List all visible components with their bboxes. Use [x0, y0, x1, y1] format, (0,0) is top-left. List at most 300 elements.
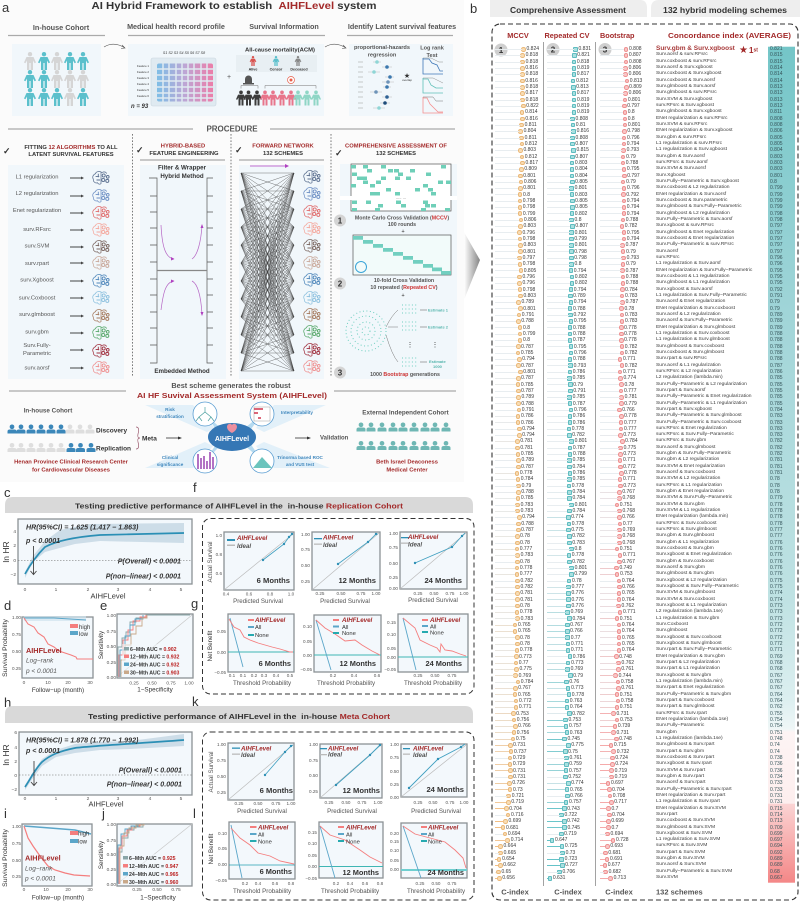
panel k: calibration 6 months: 6 Months: [260, 786, 293, 795]
scheme names column: surv.RFsrc & Surv.glmboost: [656, 527, 717, 532]
Bootstrap lollipop column: 0.708: [613, 793, 625, 799]
average c-index values column: 0.773: [770, 616, 783, 622]
panel l: decision curve 6 months: Net Benefit: [208, 833, 215, 864]
panel k: calibration 6 months: 1.00: [287, 801, 296, 806]
Repeated CV lollipop column: 0.776: [571, 603, 584, 609]
section: medical record and survival information: Medical health record profile: [127, 22, 225, 31]
panel a background: [0, 0, 464, 482]
average c-index values column: 0.692: [770, 850, 783, 856]
panel e: ROC curves: 1−Specificity: [137, 686, 174, 694]
average c-index values column: 0.785: [770, 382, 783, 388]
section: medical record and survival information: [127, 22, 325, 116]
Bootstrap lollipop column: 0.784: [625, 438, 638, 444]
MCCV lollipop column: 0.8: [523, 192, 530, 198]
panel k: calibration 6 months: Actual Survival: [208, 752, 215, 792]
panel i: survival curves: p < 0.0001: [24, 876, 56, 882]
Bootstrap lollipop column: 0.797: [627, 173, 640, 179]
panel i: survival curves: [2, 824, 93, 902]
scheme names column: ENet regularization & Surv.coxboost: [656, 306, 735, 311]
panel k: calibration 6 months: [208, 742, 296, 815]
Repeated CV lollipop column: 0.771: [571, 647, 583, 653]
Bootstrap lollipop column: 0.719: [615, 774, 627, 780]
panel b: dashed frame: [492, 24, 798, 900]
Bootstrap lollipop column: 0.788: [626, 280, 638, 286]
panel f: calibration 6 months: Ideal: [237, 543, 251, 550]
panel h: restricted cubic spline: 2: [87, 796, 90, 802]
panel k: calibration 12 months: 0.50: [309, 773, 318, 778]
average c-index values column: 0.797: [770, 223, 783, 229]
average c-index values column: 0.771: [770, 647, 783, 653]
brain icons: [304, 171, 320, 373]
panel l: decision curve 12 months: Threshold Probability: [321, 888, 380, 895]
MCCV lollipop column: 0.818: [526, 97, 538, 103]
panel g: decision curve 6 months: 0.05: [217, 629, 226, 634]
panel g: decision curve 12 months: [300, 615, 381, 687]
panel k: calibration 6 months: 0.25: [235, 801, 244, 806]
scheme names column: Surv.xgboost & Surv.coxboost: [656, 635, 721, 640]
step 2 badge and caption: 10-fold Cross Validation: [374, 278, 434, 284]
panel k: calibration 12 months: 1.00: [374, 800, 383, 805]
Bootstrap lollipop column: 0.79: [626, 154, 636, 160]
column: forward network: FORWARD NETWORK: [252, 144, 315, 150]
Bootstrap lollipop column: 0.795: [627, 230, 639, 236]
panel h: restricted cubic spline: [1, 730, 192, 808]
panel e: ROC curves: 6−Mth AUC = 0.902: [130, 647, 177, 653]
panel e: ROC curves: [98, 613, 194, 694]
panel g: decision curve 12 months: 12 Months: [339, 659, 376, 668]
Repeated CV lollipop column: 0.803: [575, 160, 587, 166]
scheme names column: ENet regularization & Surv.glmboost: [656, 325, 735, 330]
scheme names column: Surv.aorsf & Surv.gbm: [656, 565, 705, 570]
scheme names column: Surv.rpart & Surv.Fully−Parametric: [656, 647, 732, 652]
column: hybrid feature engineering: ✓: [136, 145, 144, 155]
panel f: calibration 12 months: 0.75: [301, 547, 310, 552]
panel g: decision curve 6 months: AIHFLevel: [254, 617, 286, 624]
MCCV lollipop column: 0.785: [521, 350, 533, 356]
Repeated CV lollipop column: 0.782: [572, 559, 585, 565]
panel l: decision curve 24 months: [390, 823, 467, 895]
Repeated CV lollipop column: 0.786: [573, 420, 585, 426]
panel l: decision curve 6 months: Threshold Probability: [233, 888, 292, 895]
Repeated CV lollipop column: 0.765: [570, 787, 583, 793]
Repeated CV lollipop column: 0.8: [575, 261, 581, 267]
Repeated CV lollipop column: 0.787: [573, 445, 585, 451]
panel f: calibration 6 months: 0.8: [267, 592, 274, 596]
survival legend: Deceased: [290, 68, 308, 72]
MCCV lollipop column: 0.812: [525, 141, 537, 147]
scheme names column: Surv.glmboost & Surv.coxboost: [656, 344, 724, 349]
panel c: restricted cubic spline: 4: [149, 587, 152, 593]
average c-index values column: 0.781: [770, 470, 783, 476]
Bootstrap lollipop column: 0.808: [629, 59, 642, 65]
scheme names column: L1 regularization & Surv.rpart: [656, 799, 720, 804]
Bootstrap lollipop column: 0.795: [627, 166, 639, 172]
average c-index values column: 0.713: [770, 818, 783, 824]
Bootstrap lollipop column: 0.794: [627, 204, 639, 210]
panel j: ROC curves: 12−Mth AUC = 0.947: [129, 864, 179, 870]
bootstrap diagram: ⋮: [406, 342, 414, 349]
average c-index values column: [770, 46, 783, 881]
MCCV lollipop column: 0.784: [521, 679, 533, 685]
AIHFLevel hub diagram: Clinical: [162, 455, 178, 460]
Bootstrap lollipop column: 0.766: [622, 514, 635, 520]
panel h: restricted cubic spline: 2: [14, 759, 17, 765]
Bootstrap lollipop column: 0.771: [623, 476, 636, 482]
panel f: calibration 6 months: Predicted Survival: [233, 598, 283, 605]
Bootstrap lollipop column: 0.761: [621, 666, 634, 672]
average c-index values column: 0.689: [770, 862, 783, 868]
average c-index values column: 0.773: [770, 603, 783, 609]
scheme names column: L1 regularization & Surv.aorsf: [656, 261, 721, 266]
Repeated CV lollipop column: 0.799: [574, 571, 587, 577]
MCCV lollipop column: 0.789: [521, 457, 534, 463]
Repeated CV lollipop column: 0.784: [572, 508, 585, 514]
column headers: MCCV: [507, 31, 529, 40]
average c-index values column: 0.764: [770, 692, 783, 698]
Bootstrap lollipop column: 0.783: [625, 318, 637, 324]
scheme names column: surv.RFsrc & Surv.rpart: [656, 711, 707, 716]
MCCV lollipop column: 0.817: [525, 90, 538, 96]
panel f: calibration 12 months: 12 Months: [338, 576, 376, 585]
AIHFLevel hub diagram: Interpretability: [281, 410, 313, 415]
arrow: records to features: [325, 44, 346, 48]
Repeated CV lollipop column: 0.819: [577, 65, 589, 71]
Repeated CV lollipop column: 0.753: [569, 717, 581, 723]
panel j: ROC curves: 1−Specificity: [140, 894, 177, 902]
panel k: calibration 24 months: [390, 742, 469, 815]
Repeated CV lollipop column: 0.73: [566, 850, 575, 856]
Repeated CV lollipop column: 0.816: [577, 128, 589, 134]
panel letters: i: [4, 806, 7, 821]
MCCV lollipop column: 0.786: [521, 413, 534, 419]
MCCV lollipop column: 0.791: [522, 312, 534, 318]
Repeated CV lollipop column: 0.769: [571, 609, 583, 615]
column: hybrid feature engineering: Filter & Wrapper: [158, 164, 207, 172]
scheme names column: Surv.glmboost: [656, 628, 687, 633]
scheme names column: Surv.coxboost & Surv.rpart: [656, 755, 714, 760]
Bootstrap lollipop column: 0.78: [624, 382, 634, 388]
MCCV lollipop column: 0.656: [502, 875, 515, 881]
MCCV lollipop column: 0.818: [526, 52, 538, 58]
Bootstrap lollipop column: 0.762: [622, 660, 634, 666]
Repeated CV lollipop column: 0.788: [573, 306, 586, 312]
average c-index values column: 0.778: [770, 502, 783, 508]
scheme names column: Surv.Fully−Parametric & surv.RFsrc: [656, 242, 734, 247]
Repeated CV lollipop column: 0.764: [570, 704, 582, 710]
AIHFLevel hub diagram: Trinorma based ROC: [277, 455, 324, 460]
scheme names column: Surv.xgboost & L1 regularization: [656, 603, 727, 608]
MCCV lollipop column: 0.814: [525, 109, 538, 115]
filter and embedded axes: [149, 178, 213, 363]
average c-index values column: 0.776: [770, 571, 783, 577]
Bootstrap lollipop column: 0.704: [612, 812, 625, 818]
scheme names column: L2 regularization (lambda.1se): [656, 609, 723, 614]
column: comprehensive assessment: ✓: [335, 148, 343, 158]
MCCV lollipop column: 0.765: [518, 622, 531, 628]
panel k: calibration 6 months: Ideal: [241, 752, 255, 759]
MCCV lollipop column: 0.8: [523, 337, 530, 343]
scheme names column: Surv.coxboost & L1 regularization: [656, 274, 729, 279]
panel g: decision curve 6 months: 6 Months: [259, 659, 291, 668]
average c-index values column: 0.813: [770, 97, 783, 103]
panel j: ROC curves: 0.75: [107, 838, 116, 844]
scheme names column: Surv.Fully−Parametric & Surv.xgboost: [656, 179, 739, 184]
panel k: calibration 12 months: 0.25: [309, 789, 318, 794]
panel l: decision curve 12 months: AIHFLevel: [345, 824, 377, 832]
panel k: calibration 24 months: 0.50: [429, 800, 438, 805]
icon: interpretability chart: [254, 407, 270, 421]
top scheme star: 1: [749, 46, 753, 55]
Repeated CV lollipop column: 0.743: [567, 806, 580, 812]
panel i: survival curves: Log−rank: [25, 866, 53, 872]
panel d: survival curves: 10: [45, 680, 51, 686]
average c-index values column: 0.777: [770, 533, 783, 539]
panel l: decision curve 12 months: 0.15: [308, 830, 317, 835]
panel e: ROC curves: 0.00: [107, 675, 116, 681]
scheme names column: Surv.rpart & Surv.aorsf: [656, 388, 705, 393]
average c-index values column: 0.813: [770, 90, 783, 96]
external cohort: Beth Israel Deaconess: [376, 460, 438, 466]
MCCV lollipop column: 0.731: [513, 774, 526, 780]
panel k: calibration 12 months: 0.25: [325, 800, 334, 805]
Repeated CV lollipop column: 0.719: [564, 831, 577, 837]
panel l: decision curve 6 months: [208, 822, 295, 895]
Repeated CV lollipop column: 0.766: [570, 793, 583, 799]
Repeated CV lollipop column: 0.774: [571, 780, 584, 786]
average c-index values column: 0.783: [770, 426, 783, 432]
Repeated CV lollipop column: 0.81: [576, 122, 586, 128]
average c-index values column: 0.783: [770, 420, 783, 426]
average c-index values column: 0.772: [770, 635, 783, 641]
panel k: calibration 12 months: 0.75: [309, 758, 318, 763]
panel i: survival curves: 0: [23, 887, 26, 893]
panel letter a: a: [2, 0, 10, 15]
MCCV lollipop column: 0.778: [520, 609, 532, 615]
scheme names column: Surv.gbm & Surv.coxboost: [656, 559, 714, 564]
panel g: decision curve 12 months: 0.4: [351, 673, 358, 678]
Repeated CV lollipop column: 0.796: [574, 407, 587, 413]
scheme names column: Surv.rpart & L1 regularization: [656, 666, 720, 671]
Repeated CV lollipop column: [547, 46, 591, 881]
scheme names column: ENet regularization (lambda.1se): [656, 717, 728, 722]
average c-index values column: 0.667: [770, 875, 783, 881]
average c-index values column: 0.783: [770, 413, 783, 419]
Bootstrap lollipop column: 0.724: [615, 761, 628, 767]
Bootstrap lollipop column: 0.728: [616, 837, 629, 843]
panel j: ROC curves: 0.50: [152, 887, 162, 893]
column: hybrid feature engineering: Embedded Method: [154, 368, 210, 375]
MCCV lollipop column: 0.775: [519, 666, 532, 672]
scheme names column: [656, 45, 752, 880]
Bootstrap lollipop column: 0.796: [627, 135, 640, 141]
scheme names column: ENet regularization & Surv.gbm: [656, 654, 725, 659]
heading: best scheme: Best scheme generates the robust: [171, 381, 291, 390]
panel c: restricted cubic spline: [1, 519, 192, 600]
panel letters: j: [101, 806, 105, 821]
MCCV lollipop column: 0.809: [524, 166, 537, 172]
average c-index values column: 0.797: [770, 249, 783, 255]
scheme names column: Surv.xgboost & Surv.aorsf: [656, 287, 713, 292]
Repeated CV lollipop column: 0.786: [573, 413, 585, 419]
Repeated CV lollipop column: 0.794: [574, 268, 586, 274]
people with outcomes: [236, 76, 321, 106]
Repeated CV lollipop column: 0.808: [576, 135, 588, 141]
average c-index values column: 0.768: [770, 660, 783, 666]
Bootstrap lollipop column: 0.765: [622, 635, 635, 641]
MCCV lollipop column: 0.699: [509, 818, 521, 824]
average c-index values column: 0.736: [770, 761, 783, 767]
average c-index values column: 0.748: [770, 736, 783, 742]
scheme names column: ENet regularization & Surv.aorsf: [656, 192, 726, 197]
section: latent survival features: Test: [426, 53, 438, 59]
MCCV lollipop column: 0.737: [514, 749, 526, 755]
step 2 badge and caption: +: [401, 293, 405, 299]
average c-index values column: 0.814: [770, 65, 783, 71]
icon: pyramid: [253, 457, 272, 468]
bootstrap diagram: Estimate: [429, 359, 446, 364]
scheme names column: L1 regularization & Surv.xgboost: [656, 147, 727, 152]
AIHFLevel hub diagram: Risk: [165, 407, 175, 412]
panel j: ROC curves: 30−Mth AUC = 0.960: [129, 880, 179, 886]
panel l: decision curve 6 months: 0.10: [218, 831, 227, 836]
scheme names column: ENet regularization (lambda.min): [656, 514, 728, 519]
Bootstrap lollipop column: [600, 46, 642, 881]
MCCV lollipop column: 0.767: [518, 685, 531, 691]
Repeated CV lollipop column: 0.76: [569, 679, 579, 685]
panel f: calibration 6 months: Actual Survival: [207, 542, 214, 582]
panel e: ROC curves: 0.50: [107, 644, 116, 650]
MCCV lollipop column: 0.796: [522, 230, 535, 236]
Repeated CV lollipop column: 0.804: [575, 173, 588, 179]
panel j: ROC curves: 1.00: [107, 822, 116, 828]
panel i: survival curves: 10: [43, 887, 49, 893]
scheme names column: Surv.rpart & L2 regularization: [656, 660, 720, 665]
panel l: decision curve 6 months: 6 Months: [260, 867, 292, 876]
panel f: calibration 12 months: 0.50: [301, 563, 310, 568]
Bootstrap lollipop column: 0.801: [628, 122, 640, 128]
confidence band: [25, 734, 184, 790]
Bootstrap lollipop column: 0.767: [622, 559, 635, 565]
Bootstrap lollipop column: 0.765: [622, 590, 635, 596]
Repeated CV lollipop column: 0.785: [573, 394, 585, 400]
panel h: restricted cubic spline: 0: [24, 796, 27, 802]
panel d: survival curves: AIHFLevel: [26, 646, 62, 655]
Bootstrap lollipop column: 0.768: [623, 508, 635, 514]
column: hybrid feature engineering: Hybrid Method: [160, 173, 204, 180]
panel l: decision curve 12 months: 0.05: [308, 853, 317, 858]
panel f: calibration 12 months: 0.75: [357, 591, 366, 596]
bootstrap diagram: [346, 305, 449, 369]
average c-index values column: 0.801: [770, 173, 783, 179]
panel letters: h: [4, 695, 11, 710]
panel f: calibration 24 months: 0.75: [389, 545, 398, 550]
panel e: ROC curves: 1.00: [107, 613, 116, 619]
Repeated CV lollipop column: 0.801: [575, 438, 587, 444]
scheme names column: Surv.rpart & Enet regularization: [656, 685, 725, 690]
average c-index values column: 0.788: [770, 356, 783, 362]
average c-index values column: 0.789: [770, 318, 783, 324]
Repeated CV lollipop column: 0.794: [574, 299, 586, 305]
section: medical record and survival information: Survival Information: [249, 22, 319, 31]
panel g: decision curve 6 months: 0.00: [217, 650, 226, 655]
MCCV lollipop column: 0.781: [520, 597, 533, 603]
footer labels: [501, 888, 703, 896]
scheme names column: Surv.xgboost & Surv.gbm: [656, 673, 711, 678]
column: hybrid feature engineering: FEATURE ENGINEERING: [149, 151, 219, 157]
panel l: decision curve 12 months: 0.8: [377, 881, 384, 886]
panel g: decision curve 6 months: 0.2: [251, 673, 258, 678]
Bootstrap lollipop column: 0.681: [608, 850, 621, 856]
average c-index values column: 0.772: [770, 622, 783, 628]
panel k: calibration 12 months: AIHFLevel: [327, 746, 359, 752]
panel g: decision curve 12 months: 0.6: [374, 673, 381, 678]
panel g: decision curve 24 months: −0.05: [384, 667, 396, 672]
top scheme star: ★: [739, 45, 748, 56]
Repeated CV lollipop column: 0.767: [570, 622, 583, 628]
panel f: calibration 6 months: 0.6: [246, 592, 253, 596]
panel i: survival curves: high: [78, 832, 89, 838]
panel h: restricted cubic spline: ln HR: [1, 744, 11, 766]
scheme names column: Surv.SVM & Surv.xgboost: [656, 97, 712, 102]
MCCV lollipop column: 0.784: [521, 476, 533, 482]
Repeated CV lollipop column: 0.75: [568, 749, 578, 755]
panel g: decision curve 6 months: None: [255, 633, 269, 639]
column: fitting algorithms: LATENT SURVIVAL FEATURES: [28, 152, 114, 158]
Repeated CV lollipop column: 0.778: [572, 552, 584, 558]
Bootstrap lollipop column: 0.7: [612, 806, 618, 812]
Repeated CV lollipop column: 0.785: [573, 457, 585, 463]
scheme names column: Surv.aorsf & surv.RFsrc: [656, 52, 708, 57]
MCCV lollipop column: 0.799: [523, 331, 535, 337]
Bootstrap lollipop column: 0.778: [624, 413, 637, 419]
MCCV lollipop column: 0.681: [506, 824, 518, 830]
average c-index values column: 0.791: [770, 293, 783, 299]
MCCV lollipop column: 0.731: [513, 742, 526, 748]
Bootstrap lollipop column: 0.731: [617, 711, 629, 717]
Repeated CV lollipop column: 0.763: [570, 730, 582, 736]
average c-index values column: 0.775: [770, 578, 783, 584]
panel i: survival curves: Survival Probability: [2, 829, 9, 887]
Repeated CV lollipop column: 0.706: [562, 869, 575, 875]
average c-index values column: 0.782: [770, 445, 783, 451]
MCCV lollipop column: 0.783: [521, 552, 533, 558]
scheme names column: Surv.glmboost & Surv.rpart: [656, 742, 715, 747]
scheme names column: Surv.gbm & Surv.xgboost: [656, 45, 735, 52]
Bootstrap lollipop column: 0.808: [629, 46, 642, 52]
Bootstrap lollipop column: 0.762: [622, 603, 634, 609]
bootstrap diagram: ⋮: [432, 342, 438, 349]
column: hybrid feature engineering: HYBRID-BASED: [161, 144, 205, 150]
spline curve: [25, 740, 184, 787]
scheme names column: L1 regularization & Surv.coxboost: [656, 331, 729, 336]
Repeated CV lollipop column: 0.722: [565, 812, 577, 818]
panel g: decision curve 24 months: 0.15: [387, 620, 396, 625]
MCCV lollipop column: 0.785: [521, 382, 533, 388]
panel g: decision curve 24 months: 24 Months: [425, 659, 462, 668]
Bootstrap lollipop column: 0.777: [624, 388, 636, 394]
panel f: calibration 12 months: 1.00: [301, 532, 310, 537]
Repeated CV lollipop column: 0.783: [572, 540, 585, 546]
panel l: decision curve 24 months: All: [428, 832, 434, 838]
step 1 badge and caption: [334, 214, 449, 235]
Bootstrap lollipop column: 0.77: [623, 521, 633, 527]
log rank mini plots: [423, 58, 443, 113]
Repeated CV lollipop column: 0.775: [571, 527, 584, 533]
scheme names column: Surv.Fully−Parametric: [656, 723, 704, 728]
procedure heading: PROCEDURE: [206, 124, 258, 134]
Repeated CV lollipop column: 0.805: [575, 204, 588, 210]
average c-index values column: 0.78: [770, 483, 780, 489]
